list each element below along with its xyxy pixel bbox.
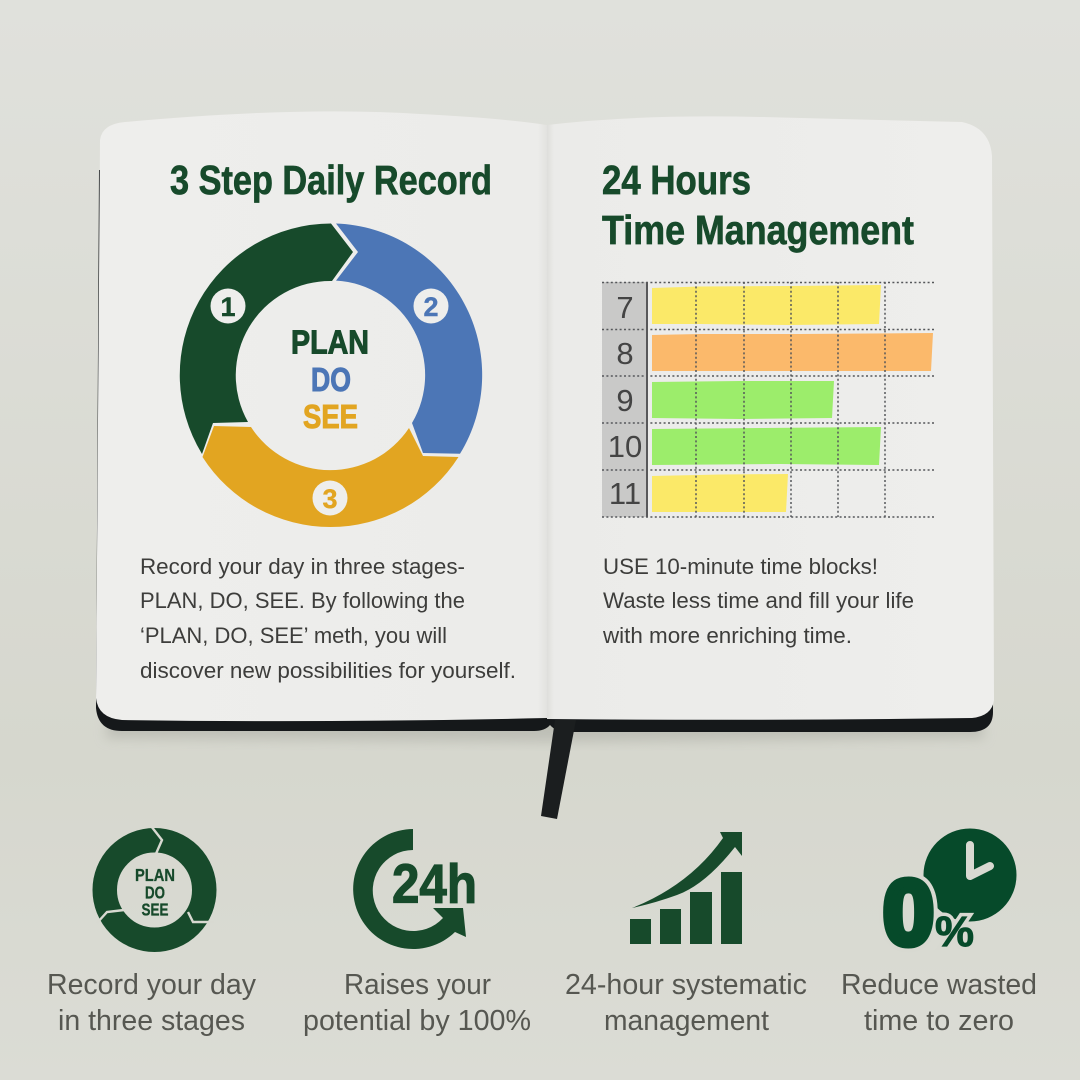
bar hour 8 [652,333,933,371]
hour labels: 9 [616,383,634,418]
caption: reduce wasted time: time to zero [864,1004,1014,1036]
icon: zero percent clock: % [935,908,974,956]
icon: plan do see ring [97,826,214,940]
hour labels [608,290,642,511]
heading: 3 Step Daily Record: 3 Step Daily Record [170,157,492,203]
heading: 24 Hours Time Management [602,157,914,253]
text block: time blocks description [602,554,914,648]
caption: record your day: Record your day [47,968,257,1000]
text block: plan do see description [140,554,516,683]
chart: time block table [602,282,934,517]
caption: raises your potential [303,968,531,1036]
bar hour 9 [652,381,834,419]
panel: open notebook [96,111,994,819]
bar hour 11 [652,474,788,512]
text block: plan do see description: ‘PLAN, DO, SEE’ meth, you will [140,623,447,648]
center label PLAN: PLAN [291,324,369,360]
badge 1: 1 [220,292,236,322]
icon: plan do see ring: SEE [142,900,168,920]
badge 3 [312,480,348,516]
center label DO: DO [311,361,351,398]
caption: raises your potential: potential by 100% [303,1004,531,1036]
heading: 24 Hours Time Management: 24 Hours [602,157,751,203]
segment 2 blue [336,224,482,454]
caption: raises your potential: Raises your [344,968,491,1000]
text block: time blocks description: with more enriching time. [602,623,852,648]
heading: 24 Hours Time Management: Time Management [602,207,914,253]
hour labels: 11 [609,476,641,511]
text block: time blocks description: USE 10-minute time blocks! [603,554,878,579]
icon: 24h arrow: 24h [392,852,477,914]
icon: zero percent clock: 0 [883,862,934,964]
hour labels: 10 [608,429,642,464]
caption: 24-hour systematic management: 24-hour systematic [565,968,807,1000]
caption: 24-hour systematic management: management [604,1004,769,1036]
text block: plan do see description: PLAN, DO, SEE. By following the [140,588,465,613]
bar hour 10 [652,427,881,465]
left page [96,111,547,721]
right page [547,116,994,720]
caption: record your day: in three stages [58,1004,245,1036]
icon: plan do see ring: PLAN [135,865,175,885]
icon: zero percent clock: 0 [883,862,934,964]
icon: 24h arrow [353,829,477,949]
icon: zero percent clock [883,828,1016,964]
hour column [602,282,646,517]
text block: plan do see description: discover new possibilities for yourself. [140,658,516,683]
bar hour 7 [652,285,881,325]
caption: reduce wasted time [841,968,1037,1036]
badge 2 [414,288,448,324]
text block: plan do see description: Record your day in three stages- [140,554,465,579]
caption: reduce wasted time: Reduce wasted [841,968,1037,1000]
center label SEE: SEE [303,398,358,435]
badge 3: 3 [322,484,338,514]
badge 2: 2 [423,292,439,322]
text block: time blocks description: Waste less time and fill your life [603,588,914,613]
segment 3 yellow [202,426,458,527]
hour labels: 7 [616,290,634,325]
caption: record your day [47,968,257,1036]
ribbon bookmark [541,720,576,819]
icon: growth bars with arrow [630,832,742,944]
badge 1 [210,288,246,324]
hour labels: 8 [616,336,634,371]
caption: 24-hour systematic management [565,968,807,1036]
notebook black cover [96,170,993,732]
chart: plan do see cycle [180,224,482,527]
icon: zero percent clock: % [935,908,974,956]
segment 1 green [180,224,353,454]
icon: plan do see ring: DO [145,882,165,902]
